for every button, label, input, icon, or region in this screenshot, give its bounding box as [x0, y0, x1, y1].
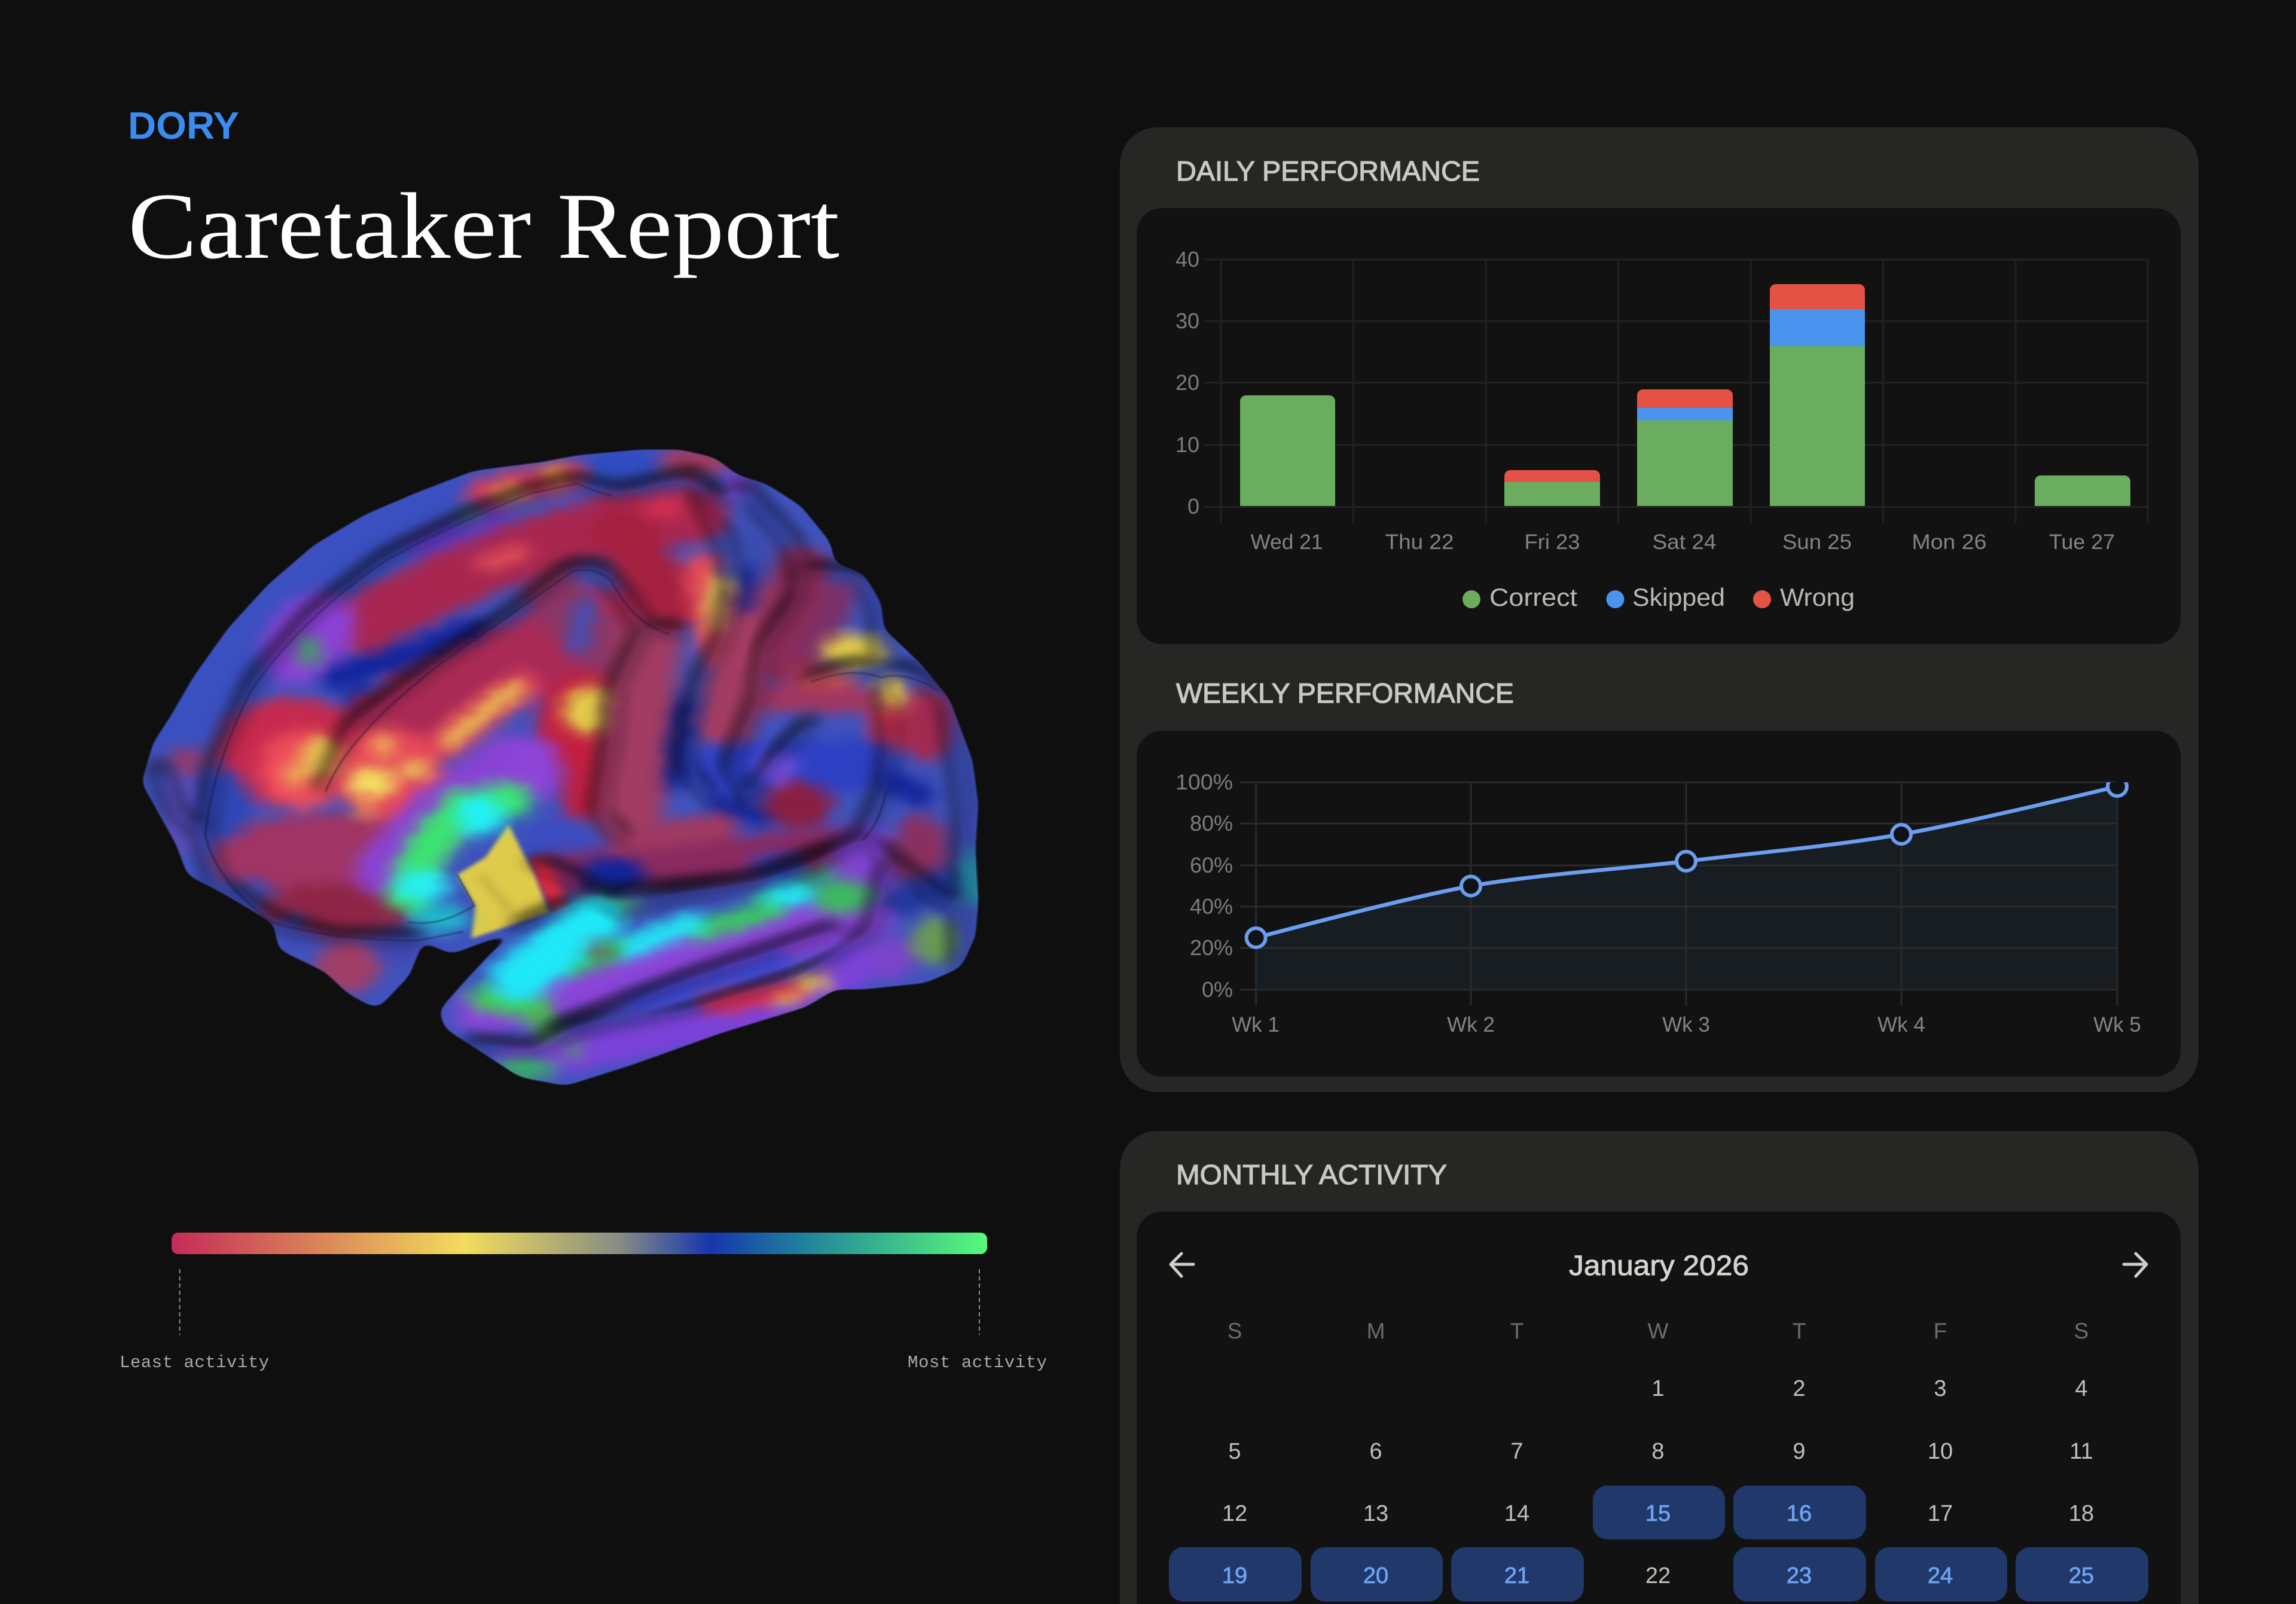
y axis labels: 10 [1176, 432, 1199, 457]
x axis labels: Tue 27 [2049, 530, 2115, 554]
weekday header: S [2074, 1319, 2089, 1343]
y axis percentage labels: 40% [1190, 894, 1233, 919]
date row 3: 12 [1222, 1501, 1247, 1526]
insula yellow region [457, 824, 560, 938]
calendar [1169, 1249, 2148, 1602]
bar chart: daily performance [1176, 247, 2148, 611]
legend: Wrong [1780, 583, 1855, 611]
x axis labels: Sun 25 [1782, 530, 1852, 554]
week labels: Wk 1 [1232, 1013, 1280, 1036]
week labels: Wk 2 [1447, 1013, 1495, 1036]
weekday header: T [1793, 1319, 1806, 1343]
bar: Sun 25 [1770, 284, 1865, 506]
date row 1: 4 [2075, 1376, 2088, 1401]
panel: weekly chart card [1137, 731, 2181, 1077]
operculum and temporal highlights [395, 795, 609, 978]
date row 2: 9 [1793, 1439, 1806, 1464]
heading: daily performance: DAILY PERFORMANCE [1176, 155, 1480, 187]
line chart: weekly performance [1176, 770, 2141, 1036]
weekday header: W [1648, 1319, 1669, 1343]
label: least activity: Least activity [120, 1353, 269, 1373]
date row 2: 8 [1651, 1439, 1665, 1464]
bar: Tue 27 [2035, 475, 2130, 506]
date row 4: 24 [1928, 1563, 1953, 1588]
x axis labels [1251, 530, 2115, 554]
x axis labels: Mon 26 [1912, 530, 1986, 554]
y axis labels: 0 [1187, 494, 1199, 519]
y axis percentage labels [1176, 770, 1233, 1002]
weekday header: T [1510, 1319, 1523, 1343]
date row 4: 20 [1363, 1563, 1388, 1588]
date row 4: 23 [1787, 1563, 1812, 1588]
bar: Wed 21 [1240, 395, 1335, 506]
weekday header: F [1934, 1319, 1947, 1343]
week labels: Wk 4 [1877, 1013, 1925, 1036]
panel: calendar card [1137, 1212, 2181, 1604]
cortical relief shading [144, 453, 978, 1051]
date row 2: 6 [1369, 1439, 1382, 1464]
weekday header: S [1228, 1319, 1242, 1343]
date row 3 [1222, 1486, 2094, 1539]
date row 4: 22 [1645, 1563, 1671, 1588]
week labels [1232, 1013, 2141, 1036]
least activity marker line [179, 1269, 181, 1335]
brand label: DORY: DORY [128, 104, 239, 147]
date row 1: 1 [1651, 1376, 1665, 1401]
legend [1463, 583, 1855, 611]
date row 3: 16 [1787, 1501, 1812, 1526]
date row 2: 7 [1510, 1439, 1523, 1464]
y axis percentage labels: 80% [1190, 811, 1233, 835]
icon: next month arrow [2124, 1254, 2147, 1276]
date row 2: 10 [1928, 1439, 1953, 1464]
date row 3: 14 [1504, 1501, 1529, 1526]
bar: Fri 23 [1504, 470, 1600, 506]
y axis percentage labels: 20% [1190, 935, 1233, 960]
date row 2: 5 [1228, 1439, 1241, 1464]
panel: monthly activity [1120, 1131, 2199, 1604]
y axis labels: 20 [1176, 370, 1199, 395]
legend: Correct [1489, 583, 1577, 611]
colour scale bar [172, 1233, 987, 1254]
panel: performance [1120, 127, 2199, 1092]
label: most activity: Most activity [908, 1353, 1047, 1373]
fold contour lines [205, 484, 938, 941]
x axis labels: Wed 21 [1251, 530, 1323, 554]
heading: monthly activity: MONTHLY ACTIVITY [1176, 1159, 1447, 1190]
date row 3: 15 [1645, 1501, 1671, 1526]
y axis percentage labels: 60% [1190, 853, 1233, 877]
x axis labels: Sat 24 [1653, 530, 1716, 554]
bar: Sat 24 [1637, 389, 1733, 506]
legend: Skipped [1632, 583, 1725, 611]
weekday header [1228, 1319, 2089, 1343]
trend line and markers [1247, 777, 2127, 947]
title: Caretaker Report [128, 174, 839, 279]
y axis percentage labels: 0% [1202, 977, 1233, 1002]
date row 3: 17 [1928, 1501, 1953, 1526]
date row 4: 25 [2069, 1563, 2094, 1588]
date row 1 [1651, 1376, 2088, 1401]
weekday header: M [1367, 1319, 1385, 1343]
y axis labels: 30 [1176, 309, 1199, 333]
brain activity map [142, 449, 979, 1085]
y axis labels: 40 [1176, 247, 1199, 272]
month title: January 2026 [1569, 1249, 1749, 1281]
y axis percentage labels: 100% [1176, 770, 1233, 794]
date row 4: 21 [1504, 1563, 1529, 1588]
area under line [1256, 786, 2117, 990]
date row 1: 3 [1934, 1376, 1947, 1401]
x axis labels: Fri 23 [1525, 530, 1580, 554]
date row 3: 18 [2069, 1501, 2094, 1526]
soft fold shadows [160, 475, 966, 1053]
most activity marker line [979, 1269, 980, 1335]
y axis labels [1176, 247, 1199, 519]
x axis labels: Thu 22 [1385, 530, 1454, 554]
date row 2: 11 [2069, 1439, 2093, 1464]
date row 4: 19 [1222, 1563, 1247, 1588]
week labels: Wk 5 [2093, 1013, 2141, 1036]
panel: daily chart card [1137, 208, 2181, 644]
date row 1: 2 [1793, 1376, 1806, 1401]
icon: previous month arrow [1171, 1254, 1193, 1276]
date row 3: 13 [1363, 1501, 1388, 1526]
week labels: Wk 3 [1662, 1013, 1710, 1036]
date row 2 [1228, 1439, 2093, 1464]
date row 4 [1169, 1547, 2148, 1602]
heading: weekly performance: WEEKLY PERFORMANCE [1176, 678, 1514, 709]
